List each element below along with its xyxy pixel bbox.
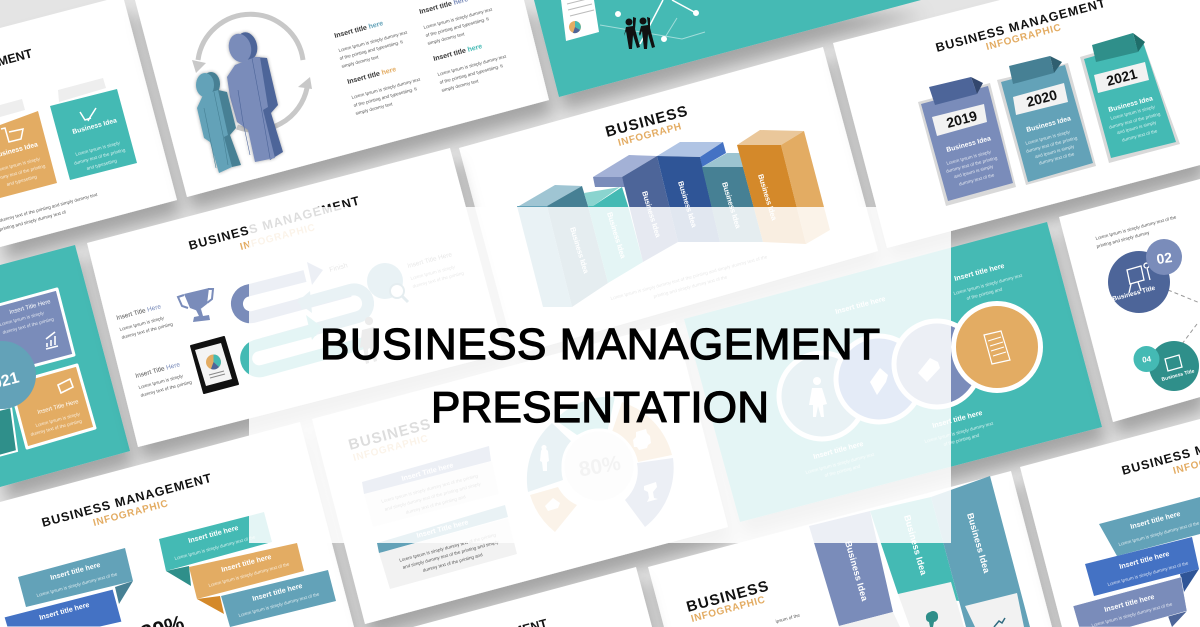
chart: 3D bars: Business Idea (756, 173, 779, 222)
card: insert title 2: dummy text of the printing and (422, 552, 484, 573)
card: insert title 1: dummy text of the printing and (405, 494, 467, 515)
heading: business infographic: BUSINESS (347, 416, 432, 454)
text block: left top (116, 303, 174, 340)
icon: two people celebrating (624, 17, 655, 49)
network lines (600, 0, 705, 44)
text block: insert title lower right: Lorem Ipsum is simply dummy text (924, 421, 994, 444)
caption: printing and simply dummy text of the (653, 274, 728, 299)
card: 2020: Business Idea (1026, 115, 1072, 134)
ribbon: left 2 (4, 589, 122, 627)
card: insert title 2: Insert Title here (415, 517, 469, 540)
ribbon: right 3 (221, 570, 336, 627)
icon: circular arrows (192, 14, 312, 130)
year circle (0, 341, 36, 409)
text block: insert title lower left: Lorem Ipsum is simply dummy text (805, 452, 875, 475)
card: 2019: and Ipsum is simply (953, 164, 994, 179)
translucent title overlay (249, 207, 951, 543)
ribbon: steel blue: Insert title here (1129, 509, 1181, 531)
text block: left top: dummy text of the printing (121, 321, 174, 340)
icon: tablet with pie chart (191, 337, 238, 393)
card: orange (10, 365, 95, 448)
panel: numbered circles slide, right (1059, 179, 1200, 422)
card: 2019: dummy text of the (958, 172, 995, 187)
ribbon: left 1: Lorem Ipsum is simply dummy text of the (36, 571, 118, 598)
heading: business infographic: INFOGRAPHIC (352, 433, 429, 464)
heading: business management infographic: BUSINESS MANAGEMENT (187, 194, 361, 253)
circle: business title 02: 02 (1155, 249, 1173, 267)
text block: insert title 4: Lorem Ipsum is simply dummy text (437, 54, 507, 77)
arrows: process path (237, 262, 375, 371)
panel: 3D bars slide (459, 47, 878, 355)
card: 2019: 2019 (945, 107, 979, 131)
card: insert title 2: and simply dummy text of the printing and simply (402, 539, 500, 570)
caption: Lorem Ipsum is simply dummy text of the printing and simply dummy text of the (610, 254, 768, 301)
column: steel blue: Business Idea (965, 512, 992, 575)
ribbon: right 1: Insert title here (187, 523, 239, 545)
panel: teal slide with rounded cards, left (0, 245, 130, 487)
ribbon: right 2: Insert title here (220, 552, 272, 574)
icon: small person (196, 72, 241, 173)
text block: insert title 4: simply dummy text (441, 78, 480, 93)
text block: intro: printing and simply dummy (1096, 230, 1151, 249)
panel: timeline 2019-2021 slide (833, 0, 1200, 248)
text block: left bottom: Insert Title Here (135, 361, 181, 380)
card: 2019: Lorem Ipsum is simply (946, 149, 992, 166)
ribbon: right 3: Insert title here (251, 581, 303, 603)
chart: 3D bars: Business Idea (640, 190, 663, 239)
icon: standing person (360, 317, 379, 364)
panel: slide with idea tabs, top left (0, 0, 177, 247)
text block: right top: dummy text of the printing (412, 270, 465, 289)
icon: large person (226, 30, 283, 162)
card: insert title 1: Lorem Ipsum is simply dummy text of the printing (381, 473, 479, 504)
circle: person (779, 353, 865, 439)
column: blue (809, 511, 900, 627)
text block: insert title 2: of the printing and typesetting. It (353, 86, 418, 108)
panel: slide with two people and cycle arrows (135, 0, 549, 197)
icon: globe with magnifier (367, 263, 408, 302)
text block: insert title 1: Insert title here (334, 20, 384, 40)
title: PRESENTATION (431, 383, 769, 432)
text block: left top: Lorem Ipsum is simply (119, 315, 165, 332)
ribbon: periwinkle: Insert title here (1103, 592, 1155, 614)
card: 2021: dummy text of the printing (1108, 111, 1161, 130)
card: 2021 (1080, 33, 1180, 163)
heading: business infographic: BUSINESS (685, 578, 770, 616)
card: orange: dummy text of the printing (30, 418, 83, 437)
panel: ribbons slide, bottom right (1020, 419, 1200, 627)
icon: report document (561, 0, 599, 41)
card: dark teal (0, 407, 17, 457)
circle: label (894, 321, 980, 407)
card: insert title 2: Lorem Ipsum is simply dummy text of the printing (399, 532, 497, 563)
card: 2020: Lorem Ipsum is simply (1025, 129, 1071, 146)
text block: left bottom (135, 361, 193, 398)
text block: insert title lower right (924, 408, 994, 447)
label: finish: Finish (329, 262, 349, 274)
icon: trophy (178, 288, 213, 322)
title (320, 320, 880, 432)
text block: right top (407, 251, 465, 289)
title: BUSINESS MANAGEMENT (320, 320, 880, 369)
card: insert title 1: Insert Title here (400, 460, 454, 483)
panel: column slide, bottom centre (648, 471, 1052, 627)
ribbon: right 1 (159, 512, 272, 586)
heading: business management infographic: INFOGRAPHIC (985, 22, 1062, 53)
circle: business title 04: Business Title (1161, 368, 1195, 383)
panel: slide with idea tabs, top left: dummy text of the printing (73, 147, 126, 166)
ribbon: steel blue: Lorem Ipsum is simply dummy text of the (1118, 520, 1200, 547)
panel: slide with idea tabs, top left: and typesetting (6, 174, 38, 187)
circle: business title 02 (1108, 239, 1182, 313)
text block: left bottom: dummy text of the printing (140, 379, 193, 398)
column: blue: Business Idea (843, 540, 870, 603)
text block: insert title 2: Insert title here (347, 66, 397, 86)
text block: insert title 4 (433, 43, 507, 93)
panel: teal slide with document and people, top (534, 0, 921, 97)
card: blue: Insert Title Here (9, 299, 52, 316)
card: 2021: Business Idea (1108, 95, 1154, 114)
ribbon: blue (1085, 537, 1199, 596)
ribbon: right 2 (189, 543, 304, 614)
text block: intro: Lorem Ipsum is simply dummy text of the (1095, 214, 1177, 241)
circle: business title 04 (1134, 341, 1199, 391)
card: 2019: dummy text of the printing (945, 155, 998, 174)
card: 2020: dummy text of the (1038, 151, 1075, 166)
text block: insert title 3: of the printing and typesetting. It (425, 16, 490, 38)
panel: slide with idea tabs, top left: dummy text of the printing and simply dummy text (0, 192, 99, 223)
chart: segmented donut: 80% (577, 452, 623, 482)
card: insert title 1 (362, 446, 499, 527)
card: 2021: and Ipsum is simply (1116, 120, 1157, 135)
panel: teal circles slide (684, 222, 1102, 522)
text block: insert title 2 (347, 66, 421, 116)
heading: business management infographic: INFOGRAPHIC (239, 222, 316, 253)
chart: 3D bars: Business Idea (720, 181, 743, 230)
text block: right top: Insert Title Here (407, 251, 453, 270)
panel: donut chart slide (312, 322, 728, 624)
heading: business management infographic: BUSINESS MANAGEMENT (40, 471, 213, 530)
column: steel blue (931, 476, 1030, 627)
text block: insert title 3: simply dummy text (427, 31, 466, 46)
text block: insert title 1 (334, 20, 408, 69)
text block: insert title 3: Lorem Ipsum is simply dummy text (423, 7, 493, 30)
card: blue (0, 289, 74, 376)
caption: ipsum of the (775, 613, 801, 624)
connector: dashed lines (1168, 290, 1200, 344)
heading: business infograph: INFOGRAPH (617, 121, 683, 149)
chart: 3D bars: Business Idea (605, 211, 628, 260)
text block: insert title top: of the printing and (966, 287, 1003, 301)
card: 2020: dummy text of the printing (1025, 135, 1078, 154)
heading: business management infographic (1120, 419, 1200, 478)
column: teal (870, 497, 964, 627)
text block: insert title top (953, 261, 1023, 301)
circle: document (954, 304, 1040, 390)
panel: slide with idea tabs, top left: and typesetting (86, 158, 118, 171)
ribbon: periwinkle (1073, 577, 1187, 627)
text block: right top: Lorem Ipsum is simply (410, 264, 456, 281)
card: blue: dummy text of the printing (2, 316, 55, 335)
text block: insert title 4: of the printing and typesetting. It (439, 63, 504, 85)
heading: business management infographic: INFOGRAPHIC (92, 498, 169, 529)
chart: 3D bars (517, 130, 830, 307)
text block: insert title 1: simply dummy text (341, 54, 380, 69)
card: blue: Lorem Ipsum is simply (0, 310, 45, 327)
chart: 3D bars: Business Idea (676, 180, 699, 229)
card: 2020: 2020 (1025, 86, 1059, 110)
heading: business infograph: BUSINESS (604, 103, 689, 141)
card: 2020: and Ipsum is simply (1034, 144, 1075, 159)
text block: insert title lower left: of the printing and (824, 464, 861, 478)
panel: slide with idea tabs, top left: Business Idea (72, 117, 118, 136)
text block: insert title 2: simply dummy text (355, 101, 394, 116)
circle: business title 02: Business Title (1112, 285, 1156, 303)
ribbon: blue: Lorem Ipsum is simply dummy text of the (1107, 560, 1189, 587)
card: 2021: Lorem Ipsum is simply (1110, 104, 1156, 121)
text block: insert title 1: of the printing and typesetting. It (339, 39, 404, 61)
card: insert title 2 (377, 505, 517, 589)
circle: business title 04: 04 (1142, 354, 1152, 365)
text block: insert title top: Insert title here (953, 261, 1005, 283)
card: orange: Lorem Ipsum is simply (35, 411, 81, 428)
text block: insert title lower right: Insert title here (931, 408, 983, 430)
text block: insert title 1: Lorem Ipsum is simply dummy text (338, 30, 408, 53)
text block: insert title lower right: of the printing and (943, 433, 980, 447)
ribbon: left 1 (18, 548, 133, 607)
ribbon: right 3: Lorem Ipsum is simply dummy text of the (238, 591, 320, 618)
chart: 3D bars: Business Idea (568, 226, 591, 275)
ribbon: right 2: Lorem Ipsum is simply dummy text of the (208, 561, 290, 588)
ribbon: left 2: Insert title here (38, 600, 90, 622)
card: insert title 1: and simply dummy text of the printing and simply (384, 481, 482, 512)
panel: slide with idea tabs, top left: printing and simply dummy text of (0, 209, 67, 232)
ribbon: left 1: Insert title here (49, 560, 101, 582)
card: 2021: 2021 (1105, 65, 1139, 89)
text block: insert title 2: Lorem Ipsum is simply dummy text (351, 77, 421, 100)
text block: insert title top: Lorem Ipsum is simply dummy text (953, 273, 1023, 296)
card: 2019: Business Idea (946, 135, 992, 154)
heading: business infographic: INFOGRAPHIC (690, 595, 766, 625)
text block: insert title 3 (419, 0, 493, 46)
panel: ribbon slide, bottom left (0, 422, 354, 627)
ribbon: steel blue (1099, 497, 1200, 556)
card: 2021: dummy text of the (1121, 128, 1158, 143)
text block: insert title 4: Insert title here (433, 43, 483, 63)
panel: partial slide, bottom (392, 567, 652, 627)
card: 2020 (997, 56, 1096, 185)
chart: segmented donut (527, 397, 674, 532)
text block: insert title upper faded: Insert title here (834, 294, 886, 316)
column: teal: Business Idea (902, 514, 929, 577)
text block: left bottom: Lorem Ipsum is simply (138, 373, 184, 390)
card: orange: Insert Title Here (37, 399, 80, 416)
panel: arrows process slide (87, 148, 505, 447)
card: 2019 (918, 77, 1016, 206)
text block: insert title lower left (805, 439, 875, 478)
circle: tag (836, 336, 922, 422)
ribbon: blue: Insert title here (1118, 549, 1170, 571)
text block: insert title lower left: Insert title here (812, 439, 864, 461)
ribbon: right 1: Lorem Ipsum is simply dummy text of the (174, 534, 256, 561)
text block: left top: Insert Title Here (116, 303, 162, 322)
panel: slide with idea tabs, top left: Lorem Ipsum is simply (75, 140, 121, 157)
